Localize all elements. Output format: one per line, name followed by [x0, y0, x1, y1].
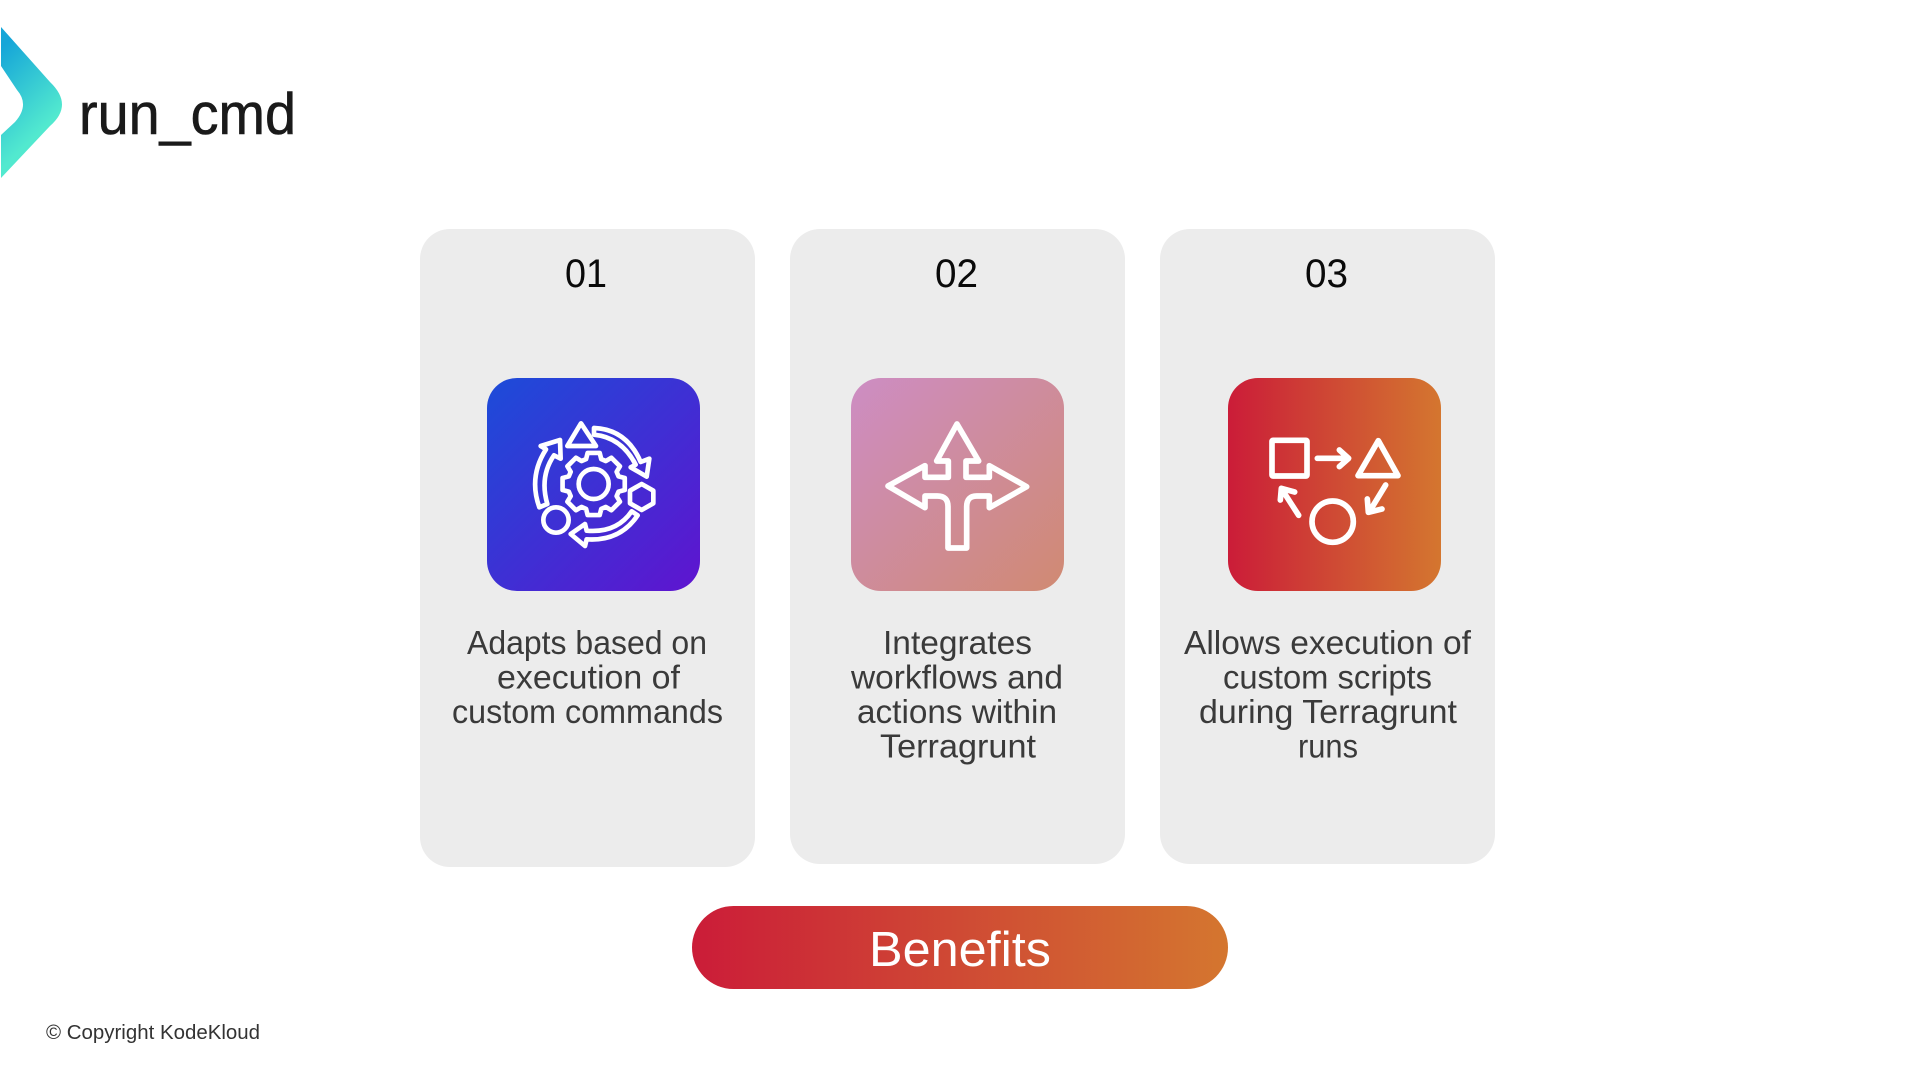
logo chevron [1, 27, 62, 178]
description 02: Terragrunt [880, 728, 1036, 764]
description 02 [850, 624, 1063, 764]
description 02: workflows and [850, 658, 1063, 696]
icon: three-way arrow [851, 378, 1064, 591]
description 01 [452, 624, 723, 730]
description 03: custom scripts [1223, 658, 1432, 696]
description 01: execution of [497, 658, 681, 696]
description 03 [1184, 624, 1472, 764]
icon: gear with cycle arrows [487, 378, 700, 591]
description 02: Integrates [883, 624, 1032, 661]
panel: card 02 [790, 229, 1125, 864]
benefits pill: Benefits [869, 923, 1051, 977]
benefits pill [692, 906, 1228, 989]
number 03: 03 [1305, 252, 1348, 296]
copyright: © Copyright KodeKloud [46, 1022, 260, 1044]
number 01: 01 [565, 252, 607, 296]
description 01: Adapts based on [467, 624, 707, 661]
title: run_cmd [79, 82, 296, 147]
icon: shapes cycle [1228, 378, 1441, 591]
description 01: custom commands [452, 693, 723, 730]
number 02: 02 [935, 252, 978, 296]
panel: card 03 [1160, 229, 1495, 864]
panel: card 01 [420, 229, 755, 867]
description 03: runs [1298, 728, 1358, 764]
description 03: during Terragrunt [1199, 693, 1457, 730]
description 03: Allows execution of [1184, 624, 1472, 661]
description 02: actions within [857, 693, 1057, 730]
